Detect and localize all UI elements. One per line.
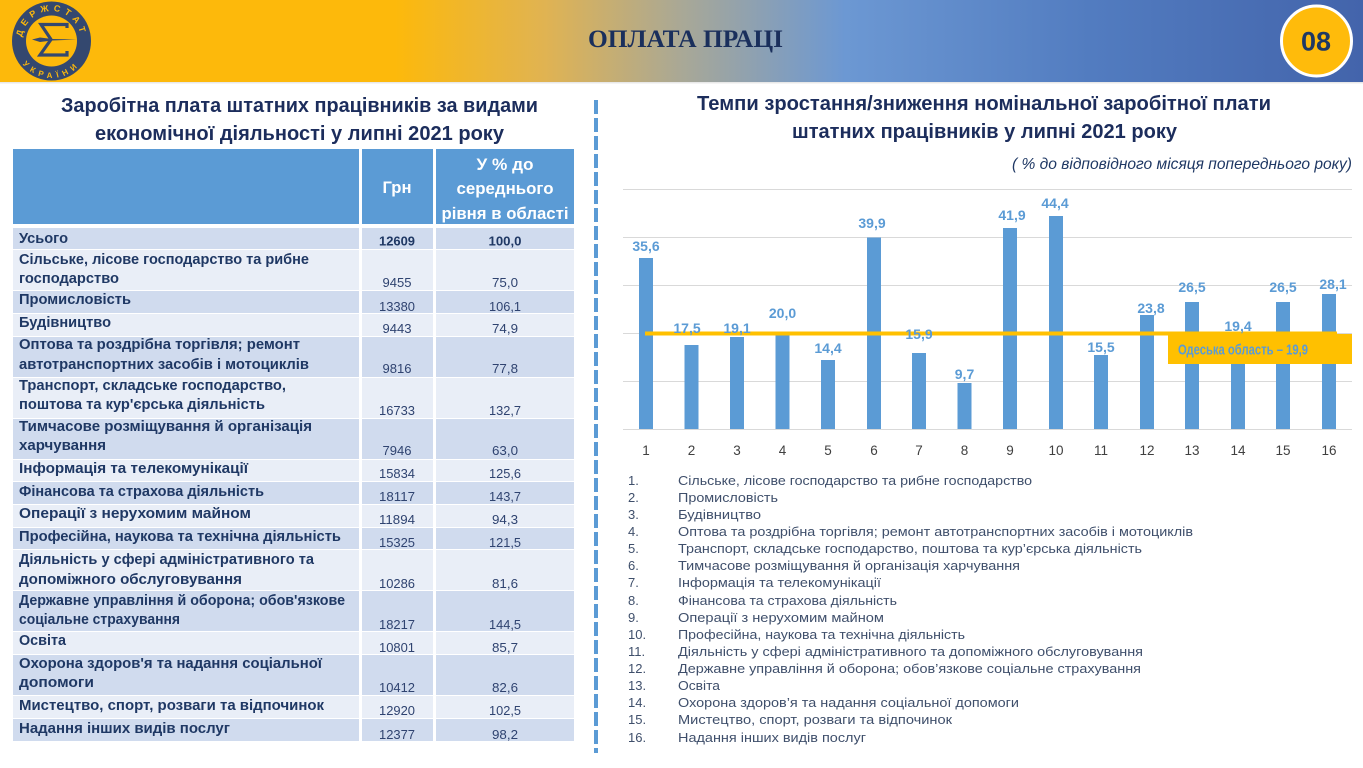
legend: activity list: Транспорт, складське господарство, поштова та кур’єрська діяльність bbox=[678, 541, 1142, 556]
value labels: 19,4 bbox=[1224, 318, 1252, 334]
legend: activity list: 2. bbox=[628, 490, 639, 505]
table column: UAH: 15834 bbox=[379, 466, 415, 481]
category axis numbers: 16 bbox=[1321, 443, 1337, 458]
table row labels: Надання інших видів послуг bbox=[19, 721, 230, 737]
table row labels: соціальне страхування bbox=[19, 612, 180, 628]
legend: activity list: Сільське, лісове господарство та рибне господарство bbox=[678, 473, 1032, 488]
table row labels: Інформація та телекомунікації bbox=[19, 461, 249, 477]
category axis numbers: 10 bbox=[1048, 443, 1064, 458]
bars bbox=[639, 216, 1336, 429]
table row labels: Транспорт, складське господарство, bbox=[19, 378, 286, 394]
icon: Derzhstat logo: ДЕРЖСТАТ bbox=[16, 5, 86, 38]
category axis numbers bbox=[642, 443, 1337, 458]
table row labels: Професійна, наукова та технічна діяльність bbox=[19, 529, 341, 545]
table column: percent of regional average: 143,7 bbox=[489, 489, 521, 504]
header band bbox=[0, 0, 1363, 84]
category axis numbers: 4 bbox=[779, 443, 787, 458]
table column: UAH: 12609 bbox=[379, 234, 415, 248]
table column: percent of regional average: 85,7 bbox=[492, 640, 518, 655]
table column: UAH: 11894 bbox=[379, 512, 415, 527]
legend: activity list: 13. bbox=[628, 678, 646, 693]
table row labels: Операції з нерухомим майном bbox=[19, 506, 251, 522]
table column: percent of regional average: 106,1 bbox=[489, 299, 521, 314]
legend: activity list: 3. bbox=[628, 507, 639, 522]
table header: Грн bbox=[382, 178, 412, 197]
value labels: 23,8 bbox=[1137, 300, 1165, 316]
category axis numbers: 7 bbox=[915, 443, 923, 458]
table column: percent of regional average: 81,6 bbox=[492, 576, 518, 591]
legend: activity list bbox=[628, 473, 1193, 745]
table column: percent of regional average: 100,0 bbox=[488, 234, 522, 248]
category axis numbers: 9 bbox=[1006, 443, 1014, 458]
table: wages by economic activity bbox=[13, 149, 574, 742]
table row labels bbox=[19, 231, 345, 737]
table row labels: Промисловість bbox=[19, 292, 131, 308]
table column: percent of regional average: 63,0 bbox=[492, 443, 518, 458]
value labels: 9,7 bbox=[955, 366, 974, 382]
table column: percent of regional average: 144,5 bbox=[489, 617, 521, 632]
table row labels: Охорона здоров'я та надання соціальної bbox=[19, 656, 323, 672]
table column: percent of regional average: 102,5 bbox=[489, 703, 521, 718]
page number badge: 08 bbox=[1301, 26, 1331, 56]
legend: activity list: Професійна, наукова та технічна діяльність bbox=[678, 627, 965, 642]
table column: percent of regional average: 125,6 bbox=[489, 466, 521, 481]
legend: activity list: 4. bbox=[628, 524, 639, 539]
table row labels: Сільське, лісове господарство та рибне bbox=[19, 252, 309, 268]
legend: activity list: Мистецтво, спорт, розваги та відпочинок bbox=[678, 712, 952, 727]
table column: UAH: 9455 bbox=[382, 275, 412, 290]
value labels: 20,0 bbox=[769, 305, 796, 321]
chart subtitle: ( % до відповідного місяця попереднього року) bbox=[1012, 156, 1352, 173]
category axis numbers: 2 bbox=[688, 443, 695, 458]
legend: activity list: Операції з нерухомим майном bbox=[678, 610, 884, 625]
value labels: 17,5 bbox=[673, 320, 701, 336]
table column: percent of regional average: 132,7 bbox=[489, 403, 521, 418]
value labels: 15,5 bbox=[1087, 339, 1115, 355]
callout: Odesa region bbox=[1168, 334, 1352, 364]
legend: activity list: 5. bbox=[628, 541, 639, 556]
legend: activity list: Надання інших видів послуг bbox=[678, 730, 866, 745]
table row backgrounds bbox=[13, 228, 574, 741]
table column: percent of regional average: 98,2 bbox=[492, 727, 518, 742]
table row labels: Діяльність у сфері адміністративного та bbox=[19, 552, 315, 568]
legend: activity list: 8. bbox=[628, 593, 639, 608]
category axis numbers: 15 bbox=[1275, 443, 1291, 458]
table row labels: Державне управління й оборона; обов'язкове bbox=[19, 593, 345, 609]
left heading bbox=[61, 95, 538, 145]
table row labels: поштова та кур'єрська діяльність bbox=[19, 397, 265, 413]
table column: UAH: 9443 bbox=[382, 321, 412, 336]
legend: activity list: 12. bbox=[628, 661, 646, 676]
table row labels: харчування bbox=[19, 438, 106, 454]
table row labels: Усього bbox=[19, 231, 68, 247]
value labels: 28,1 bbox=[1319, 276, 1347, 292]
legend: activity list: Державне управління й оборона; обов’язкове соціальне страхування bbox=[678, 661, 1141, 676]
table header: У % до bbox=[476, 155, 534, 174]
table row labels: допоміжного обслуговування bbox=[19, 572, 242, 588]
table row labels: допомоги bbox=[19, 675, 94, 691]
table row labels: Мистецтво, спорт, розваги та відпочинок bbox=[19, 698, 325, 714]
table column: UAH: 9816 bbox=[382, 361, 412, 376]
table header: рівня в області bbox=[442, 204, 568, 223]
table column: percent of regional average: 77,8 bbox=[492, 361, 518, 376]
category axis numbers: 8 bbox=[961, 443, 968, 458]
category axis numbers: 11 bbox=[1094, 443, 1108, 458]
value labels: 26,5 bbox=[1269, 279, 1297, 295]
legend: activity list: Інформація та телекомунікації bbox=[678, 575, 881, 590]
value labels: 35,6 bbox=[632, 238, 660, 254]
right heading: штатних працівників у липні 2021 року bbox=[792, 121, 1178, 143]
value labels: 19,1 bbox=[723, 320, 751, 336]
legend: activity list: 15. bbox=[628, 712, 646, 727]
table column: percent of regional average: 82,6 bbox=[492, 680, 518, 695]
table row labels: Освіта bbox=[19, 633, 67, 649]
table column: UAH: 10801 bbox=[379, 640, 415, 655]
regional average line bbox=[645, 332, 1337, 336]
table column: UAH: 18117 bbox=[379, 489, 415, 504]
legend: activity list: Будівництво bbox=[678, 507, 761, 522]
value labels: 44,4 bbox=[1041, 195, 1069, 211]
bar chart: wage growth by activity bbox=[623, 190, 1352, 458]
legend: activity list: Промисловість bbox=[678, 490, 778, 505]
table row labels: автотранспортних засобів і мотоциклів bbox=[19, 357, 309, 373]
category axis numbers: 12 bbox=[1139, 443, 1155, 458]
legend: activity list: Тимчасове розміщування й організація харчування bbox=[678, 558, 1020, 573]
left heading: Заробітна плата штатних працівників за видами bbox=[61, 95, 538, 117]
value labels: 14,4 bbox=[814, 340, 842, 356]
icon: Derzhstat logo bbox=[12, 2, 91, 80]
table row labels: господарство bbox=[19, 271, 119, 287]
table column: percent of regional average: 75,0 bbox=[492, 275, 518, 290]
legend: activity list: Оптова та роздрібна торгівля; ремонт автотранспортних засобів і мотоциклів bbox=[678, 524, 1193, 539]
table column: UAH: 13380 bbox=[379, 299, 415, 314]
category axis numbers: 14 bbox=[1230, 443, 1246, 458]
legend: activity list: Фінансова та страхова діяльність bbox=[678, 593, 897, 608]
title: ОПЛАТА ПРАЦІ bbox=[588, 26, 783, 53]
callout: Odesa region: Одеська область – 19,9 bbox=[1178, 342, 1308, 358]
category axis numbers: 6 bbox=[870, 443, 878, 458]
table column: UAH bbox=[379, 234, 415, 742]
table column: UAH: 15325 bbox=[379, 535, 415, 550]
table row labels: Оптова та роздрібна торгівля; ремонт bbox=[19, 337, 300, 353]
legend: activity list: Освіта bbox=[678, 678, 721, 693]
table column: UAH: 16733 bbox=[379, 403, 415, 418]
table column: UAH: 7946 bbox=[382, 443, 412, 458]
legend: activity list: 1. bbox=[628, 473, 639, 488]
table column: percent of regional average: 94,3 bbox=[492, 512, 518, 527]
table column: percent of regional average bbox=[488, 234, 522, 742]
table column: UAH: 12920 bbox=[379, 703, 415, 718]
table column: UAH: 10286 bbox=[379, 576, 415, 591]
value labels: 15,9 bbox=[905, 326, 933, 342]
legend: activity list: 16. bbox=[628, 730, 646, 745]
legend: activity list: 9. bbox=[628, 610, 639, 625]
table column: UAH: 18217 bbox=[379, 617, 415, 632]
category axis numbers: 5 bbox=[824, 443, 832, 458]
legend: activity list: 14. bbox=[628, 695, 646, 710]
legend: activity list: Охорона здоров’я та надання соціальної допомоги bbox=[678, 695, 1019, 710]
value labels: 26,5 bbox=[1178, 279, 1206, 295]
icon: Derzhstat logo: УКРАЇНИ bbox=[22, 60, 77, 78]
table column: percent of regional average: 121,5 bbox=[489, 535, 521, 550]
value labels bbox=[632, 195, 1347, 382]
left heading: економічної діяльності у липні 2021 року bbox=[95, 123, 505, 145]
category axis numbers: 3 bbox=[733, 443, 741, 458]
table row labels: Тимчасове розміщування й організація bbox=[19, 419, 312, 435]
right heading bbox=[697, 93, 1271, 143]
legend: activity list: 6. bbox=[628, 558, 639, 573]
table column: percent of regional average: 74,9 bbox=[492, 321, 518, 336]
legend: activity list: 10. bbox=[628, 627, 646, 642]
legend: activity list: 11. bbox=[628, 644, 645, 659]
table column: UAH: 12377 bbox=[379, 727, 415, 742]
table row labels: Будівництво bbox=[19, 315, 111, 331]
value labels: 39,9 bbox=[858, 215, 886, 231]
table column: UAH: 10412 bbox=[379, 680, 415, 695]
value labels: 41,9 bbox=[998, 207, 1026, 223]
category axis numbers: 13 bbox=[1184, 443, 1200, 458]
table row labels: Фінансова та страхова діяльність bbox=[19, 484, 264, 500]
legend: activity list: 7. bbox=[628, 575, 639, 590]
legend: activity list: Діяльність у сфері адміністративного та допоміжного обслуговування bbox=[678, 644, 1143, 659]
page number badge bbox=[1282, 6, 1352, 76]
table header bbox=[13, 149, 574, 224]
table header: середнього bbox=[456, 179, 554, 198]
right heading: Темпи зростання/зниження номінальної заробітної плати bbox=[697, 93, 1271, 115]
category axis numbers: 1 bbox=[642, 443, 650, 458]
